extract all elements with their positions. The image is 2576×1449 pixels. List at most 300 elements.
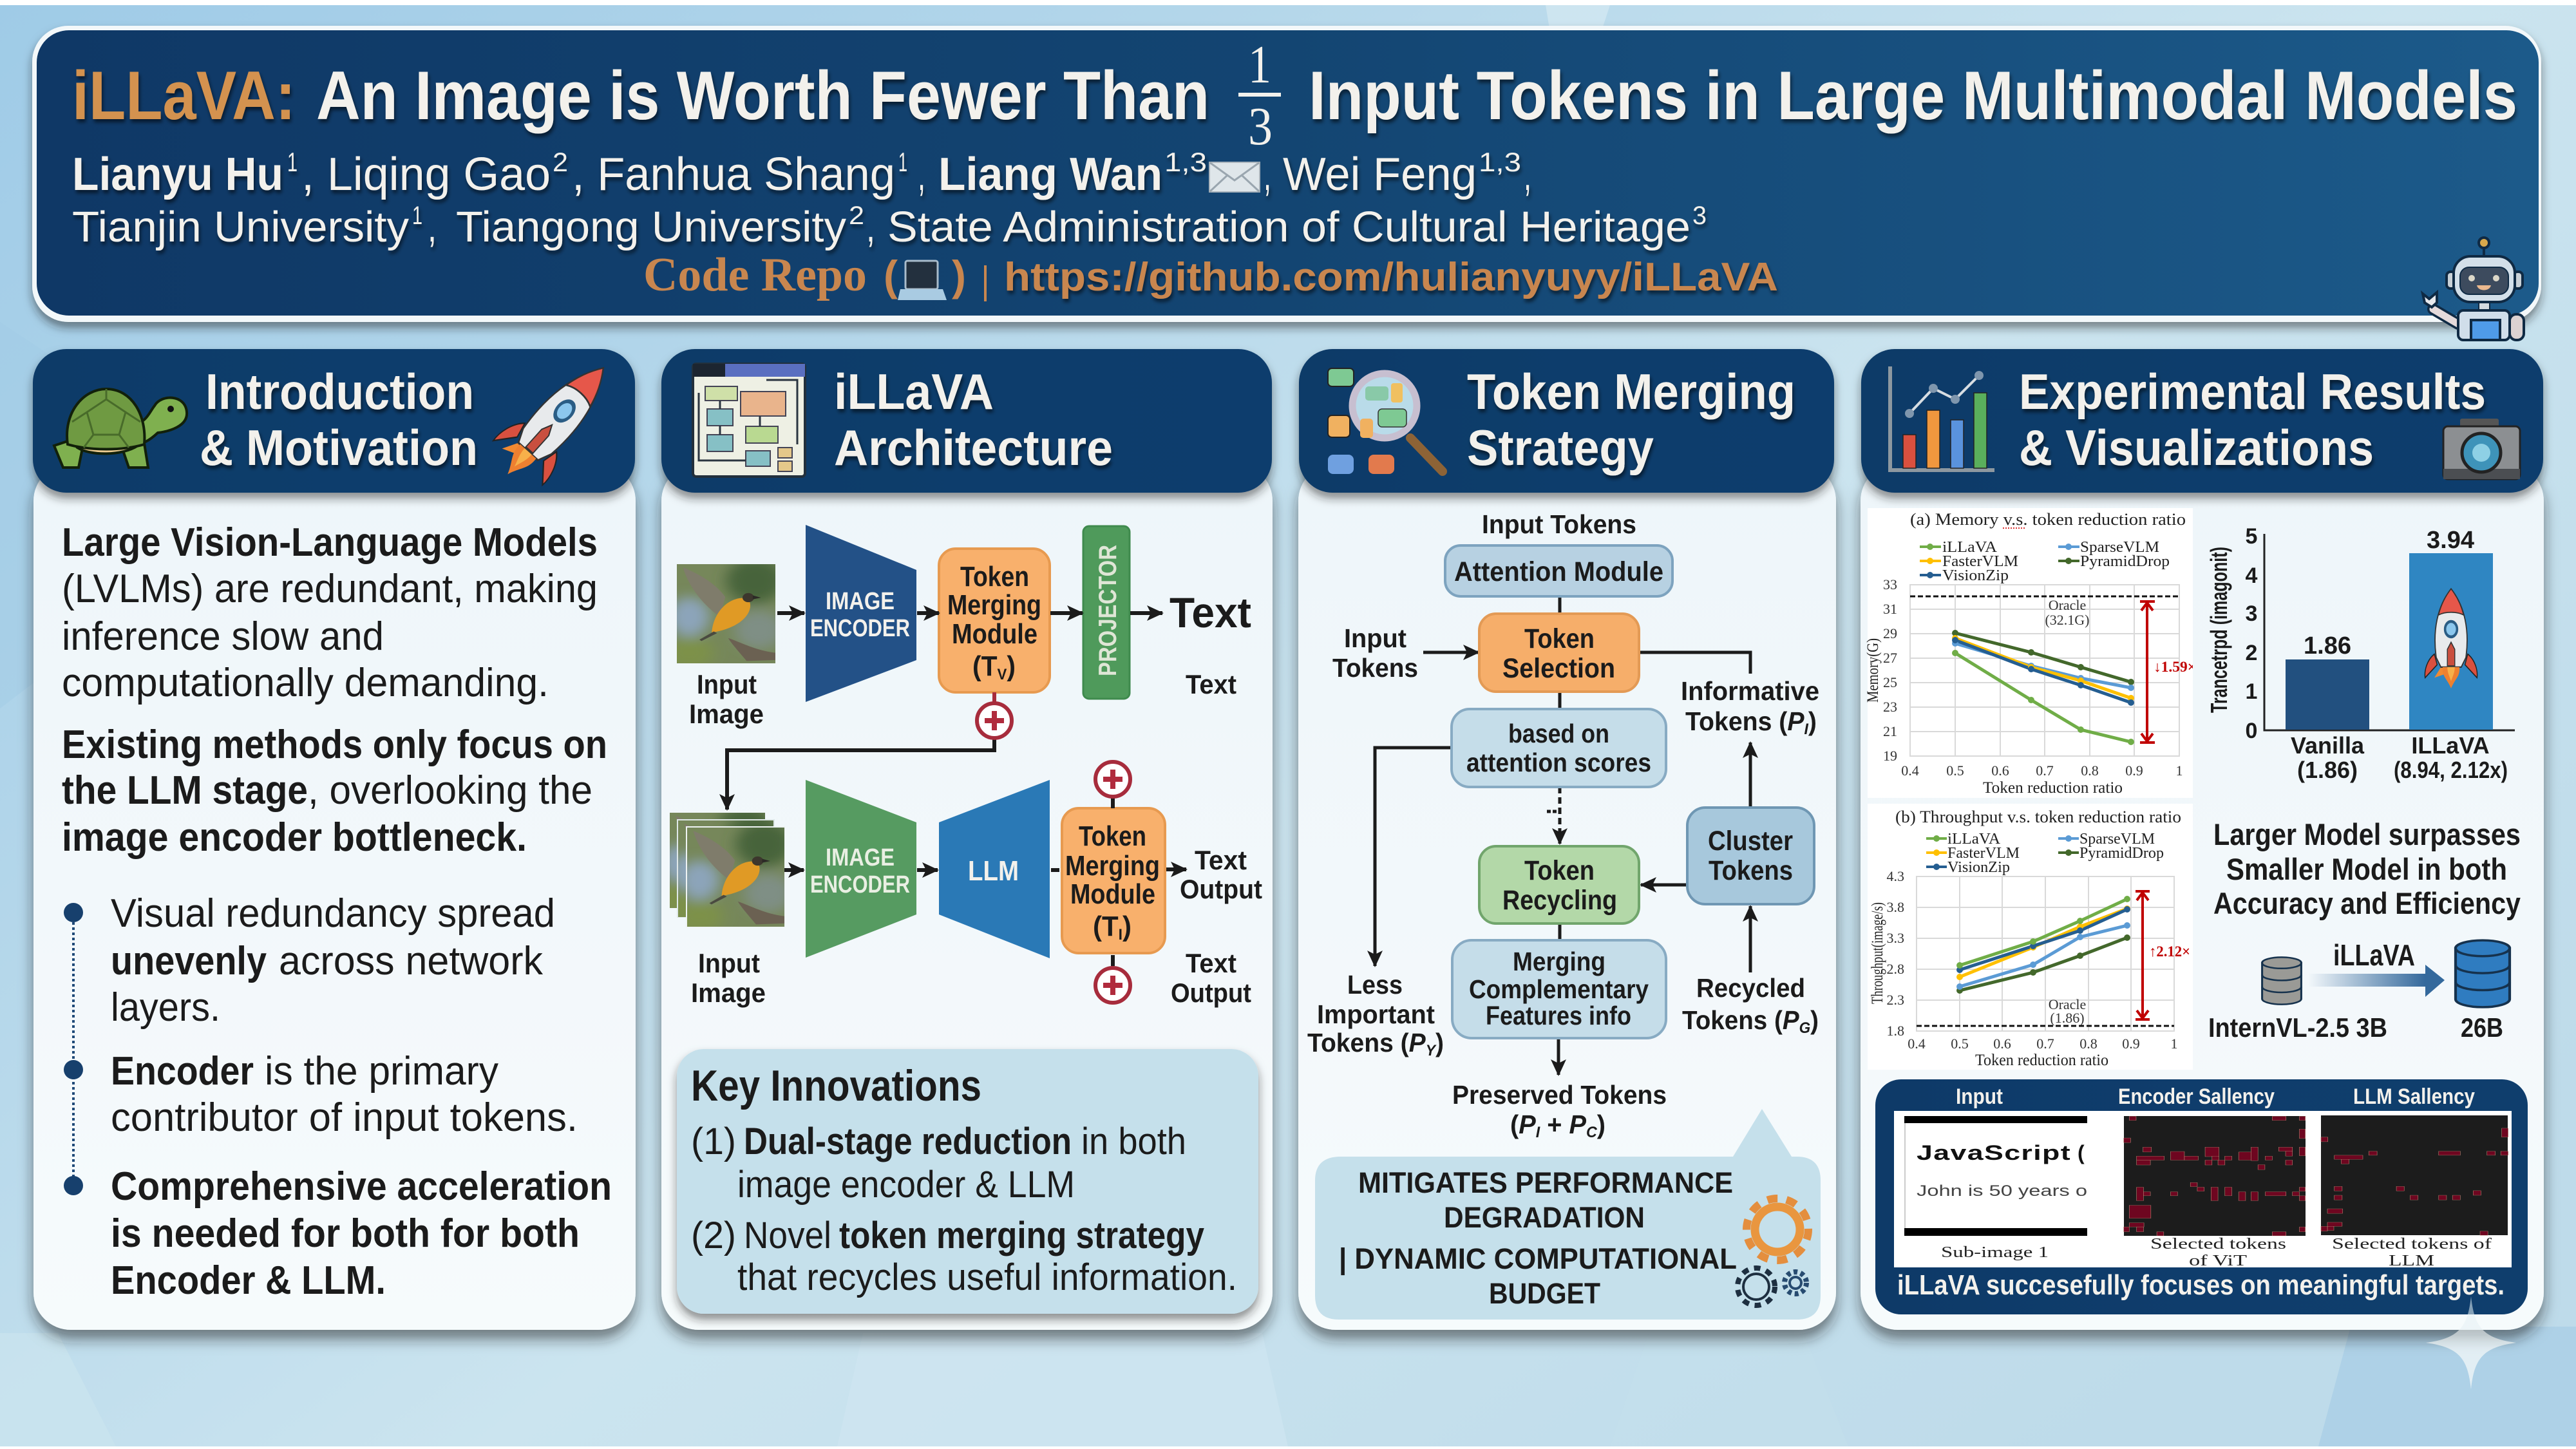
callout: performance: | DYNAMIC COMPUTATIONAL bbox=[1339, 1242, 1737, 1276]
labels: flow side text: Tokens (P bbox=[1682, 1005, 1800, 1035]
bar chart: vanilla vs illava: Trancetrpd (imagonit) bbox=[2206, 547, 2232, 713]
tick labels: 0.6 bbox=[1993, 1036, 2011, 1052]
labels: flow side text: ) bbox=[1808, 706, 1817, 736]
affiliations: 3 bbox=[1692, 202, 1707, 230]
column headings bbox=[1956, 1084, 2475, 1109]
image captions: of ViT bbox=[2189, 1253, 2247, 1269]
callout: key innovations: Dual-stage reduction bbox=[744, 1121, 1072, 1162]
model scaling graphic: iLLaVA bbox=[2333, 938, 2415, 972]
tick labels: 0.8 bbox=[2079, 1036, 2098, 1052]
arrow: scaling bbox=[2308, 965, 2445, 997]
image encoder blue: ENCODER bbox=[810, 615, 910, 642]
axis titles: Memory(G) bbox=[1864, 638, 1882, 703]
image captions: LLM bbox=[2389, 1253, 2434, 1269]
icon: gears bbox=[1738, 1198, 1808, 1305]
series markers bbox=[1956, 896, 2130, 994]
y ticks: 0 bbox=[2246, 719, 2257, 743]
node: attention scores: based on bbox=[1508, 719, 1609, 748]
affiliations: Tianjin University bbox=[72, 203, 410, 251]
token merging module TI: ) bbox=[1122, 911, 1132, 942]
bar: vanilla: Vanilla bbox=[2291, 732, 2365, 759]
bar chart: vanilla vs illava bbox=[2206, 524, 2515, 783]
axis titles: Token reduction ratio bbox=[1975, 1052, 2108, 1069]
node: cluster tokens: Tokens bbox=[1709, 855, 1793, 886]
legend: SparseVLM bbox=[2079, 831, 2155, 848]
labels: flow side text: Recycled bbox=[1696, 973, 1805, 1003]
tick labels: 0.4 bbox=[1901, 762, 1919, 779]
output text top: Text bbox=[1186, 669, 1236, 699]
image: input bird bbox=[665, 558, 784, 669]
tick labels: 0.8 bbox=[2081, 762, 2099, 779]
labels: flow side text: Tokens bbox=[1332, 653, 1418, 683]
tick labels bbox=[1883, 576, 2183, 779]
flowchart: token merging bbox=[1307, 509, 1819, 1141]
image encoder blue: IMAGE bbox=[826, 588, 895, 615]
node: attention module: Attention Module bbox=[1454, 556, 1663, 587]
icon: architecture diagram bbox=[693, 364, 805, 477]
labels: flow side text bbox=[1307, 623, 1819, 1141]
code repo link: ( bbox=[884, 252, 898, 299]
authors: 1,3 bbox=[1164, 147, 1207, 177]
panel: experimental results body bbox=[1861, 464, 2544, 1330]
image stack bbox=[658, 806, 793, 933]
labels: flow side text: (P bbox=[1510, 1110, 1537, 1139]
annotation: 1.59x reduction bbox=[2140, 601, 2196, 743]
heading bar: architecture bbox=[661, 349, 1272, 493]
text block: motivation paragraphs: Existing methods only focus on bbox=[62, 723, 607, 767]
callout: key innovations: that recycles useful information. bbox=[737, 1256, 1237, 1298]
authors: 1,3 bbox=[1479, 147, 1521, 177]
title: iLLaVA: bbox=[72, 57, 296, 134]
annotation: 1.59x reduction: ↓1.59× bbox=[2154, 659, 2196, 675]
affiliations: 1 bbox=[412, 202, 422, 230]
icon: envelope bbox=[1209, 162, 1260, 192]
image captions bbox=[1941, 1236, 2492, 1269]
output text top bbox=[1170, 589, 1251, 699]
image: encoder saliency bbox=[2124, 1116, 2306, 1236]
labels: flow side text: I bbox=[1536, 1124, 1540, 1141]
token merging module Tv: Token bbox=[960, 561, 1029, 592]
arrows: top row bbox=[777, 611, 1162, 615]
connectors bbox=[1375, 596, 1750, 1075]
label: text output bbox=[1171, 845, 1262, 1008]
heading text: Introduction bbox=[205, 363, 474, 420]
authors: , bbox=[1264, 149, 1271, 200]
affiliations: , bbox=[428, 203, 437, 251]
image captions: Selected tokens of bbox=[2332, 1236, 2492, 1253]
legend: iLLaVA bbox=[1947, 831, 2001, 848]
labels: flow side text: ) bbox=[1435, 1028, 1444, 1057]
tick labels: 0.5 bbox=[1946, 762, 1964, 779]
series lines bbox=[1955, 633, 2131, 742]
panel: token merging body bbox=[1298, 464, 1836, 1330]
title bbox=[72, 57, 2517, 134]
token merging module Tv: Module bbox=[952, 618, 1037, 650]
token merging module TI: I bbox=[1119, 926, 1122, 943]
image: input sub-image: JavaScript bbox=[1917, 1141, 2071, 1164]
label: input image top: Input bbox=[697, 669, 757, 699]
text block: larger model bbox=[2213, 817, 2521, 920]
callout: key innovations bbox=[677, 1049, 1258, 1314]
labels: flow side text: G bbox=[1799, 1019, 1810, 1037]
series lines bbox=[1960, 899, 2127, 990]
label: input image bottom: Input bbox=[698, 948, 760, 978]
callout: key innovations: in both bbox=[1081, 1121, 1186, 1162]
heading text: & Visualizations bbox=[2019, 419, 2374, 476]
chart: memory vs token reduction ratio bbox=[1864, 508, 2196, 798]
tick labels: 0.7 bbox=[2036, 1036, 2054, 1052]
heading text: iLLaVA bbox=[834, 363, 994, 420]
node: cluster tokens: Cluster bbox=[1708, 826, 1793, 857]
tick labels: 23 bbox=[1883, 699, 1897, 715]
authors: Liang Wan bbox=[938, 149, 1162, 200]
bar: vanilla: 1.86 bbox=[2304, 632, 2351, 659]
oracle line: Oracle bbox=[2049, 996, 2086, 1012]
text block: motivation paragraphs: computationally demanding. bbox=[62, 661, 549, 705]
image captions: Selected tokens bbox=[2150, 1236, 2286, 1253]
node: merging complementary features: Merging bbox=[1513, 947, 1605, 976]
connector with plus node bbox=[727, 692, 1012, 810]
image: input sub-image: John is 50 years o bbox=[1917, 1182, 2087, 1200]
chart: throughput vs token reduction ratio: (b) Throughput v.s. token reduction ratio bbox=[1895, 808, 2181, 826]
legend: VisionZip bbox=[1947, 859, 2010, 876]
node: token selection bbox=[1479, 614, 1639, 692]
code repo link: ) bbox=[952, 252, 966, 299]
label: input tokens top: Input Tokens bbox=[1482, 509, 1636, 539]
tick labels: 29 bbox=[1883, 625, 1897, 641]
legend: FasterVLM bbox=[1942, 553, 2018, 570]
label: input image bottom bbox=[691, 948, 766, 1008]
heading text: Token Merging bbox=[1467, 363, 1795, 420]
heading bar: experimental results bbox=[1861, 349, 2543, 493]
callout: key innovations: (1) bbox=[691, 1121, 736, 1162]
output text top: Text bbox=[1170, 589, 1251, 636]
tick labels: 27 bbox=[1883, 650, 1897, 666]
image: input sub-image: ( bbox=[2078, 1141, 2085, 1164]
node: attention scores: attention scores bbox=[1466, 748, 1651, 777]
arrows: bottom row bbox=[784, 797, 1186, 966]
bar: vanilla bbox=[2286, 632, 2369, 783]
heading text bbox=[1467, 363, 1795, 476]
token merging module TI bbox=[1062, 808, 1165, 953]
node: token recycling: Recycling bbox=[1502, 885, 1617, 916]
image encoder green: ENCODER bbox=[810, 871, 910, 898]
labels: flow side text: + bbox=[1540, 1110, 1569, 1139]
chart: throughput vs token reduction ratio bbox=[1868, 804, 2193, 1070]
plus nodes bbox=[1095, 762, 1130, 1003]
token merging module TI: Module bbox=[1070, 878, 1155, 910]
label: text output: Text bbox=[1195, 845, 1247, 875]
labels: flow side text: Y bbox=[1426, 1042, 1437, 1059]
node: cluster tokens bbox=[1687, 808, 1814, 904]
bar: vanilla: (1.86) bbox=[2297, 757, 2358, 783]
panel: architecture body bbox=[661, 464, 1273, 1330]
tick labels: 19 bbox=[1883, 748, 1897, 764]
caption: meaningful targets: iLLaVA succesefully focuses on meaningful targets. bbox=[1897, 1269, 2505, 1301]
labels: flow side text: Important bbox=[1317, 999, 1435, 1029]
affiliations: 2 bbox=[849, 202, 864, 230]
label: input image top: Image bbox=[689, 699, 764, 729]
authors: , Fanhua Shang bbox=[572, 149, 895, 200]
list: motivation bullets: Encoder bbox=[111, 1049, 254, 1094]
image encoder green: IMAGE bbox=[826, 844, 895, 871]
heading bar: token merging strategy bbox=[1299, 349, 1834, 493]
affiliations: State Administration of Cultural Heritage bbox=[887, 203, 1690, 251]
text block: motivation paragraphs: (LVLMs) are redundant, making bbox=[62, 567, 598, 611]
list: motivation bullets: is needed for both for both bbox=[111, 1211, 580, 1256]
fraction one third: 1 bbox=[1248, 35, 1271, 95]
heading text bbox=[200, 363, 478, 476]
legend: PyramidDrop bbox=[2080, 553, 2170, 570]
labels: flow side text: Informative bbox=[1681, 676, 1819, 706]
node: merging complementary features bbox=[1452, 940, 1666, 1038]
node: token recycling bbox=[1479, 846, 1639, 923]
labels: flow side text: Input bbox=[1344, 623, 1406, 653]
title: An Image is Worth Fewer Than bbox=[316, 57, 1209, 134]
heading text: Experimental Results bbox=[2019, 363, 2486, 420]
text block: motivation paragraphs: inference slow and bbox=[62, 614, 384, 659]
axis titles: Throughput(image/s) bbox=[1869, 902, 1886, 1004]
legend: SparseVLM bbox=[2080, 539, 2159, 556]
tick labels: 2.3 bbox=[1887, 992, 1904, 1008]
tick labels: 33 bbox=[1883, 576, 1897, 592]
tick labels: 21 bbox=[1883, 723, 1897, 739]
token merging module Tv: V bbox=[998, 666, 1007, 683]
affiliations: , bbox=[866, 203, 875, 251]
list: motivation bullets: Visual redundancy spread bbox=[111, 891, 555, 936]
label: text output: Output bbox=[1171, 978, 1251, 1008]
labels: flow side text: Less bbox=[1347, 970, 1403, 999]
authors: Wei Feng bbox=[1283, 149, 1477, 200]
labels: flow side text: C bbox=[1586, 1124, 1597, 1141]
tick labels: 3.8 bbox=[1887, 899, 1904, 915]
oracle line bbox=[1910, 596, 2179, 628]
icon: laptop bbox=[898, 261, 947, 300]
icon: sparkle star bbox=[2426, 1296, 2516, 1389]
tick labels: 25 bbox=[1883, 674, 1897, 690]
y ticks: 5 bbox=[2246, 524, 2257, 549]
label: input image top bbox=[689, 669, 764, 729]
list: motivation bullets: Encoder & LLM. bbox=[111, 1258, 386, 1303]
image captions: Sub-image 1 bbox=[1941, 1244, 2049, 1261]
callout: key innovations: token merging strategy bbox=[839, 1215, 1204, 1256]
callout: performance: DEGRADATION bbox=[1444, 1201, 1645, 1234]
token merging module TI: Token bbox=[1079, 820, 1146, 852]
y ticks: 4 bbox=[2246, 564, 2258, 588]
callout: key innovations: (2) bbox=[691, 1215, 736, 1256]
node: merging complementary features: Complementary bbox=[1469, 974, 1649, 1004]
grid and axes bbox=[1917, 876, 2174, 1031]
image encoder green bbox=[806, 780, 916, 958]
tick labels: 1 bbox=[2175, 762, 2183, 779]
icon: robot mascot bbox=[2423, 238, 2524, 340]
icon: turtle bbox=[54, 389, 187, 468]
token merging module TI: (T bbox=[1093, 911, 1120, 942]
authors: Lianyu Hu bbox=[72, 149, 283, 200]
image encoder blue bbox=[806, 525, 916, 702]
panel: saliency visualization bbox=[1875, 1079, 2528, 1314]
node: token selection: Selection bbox=[1502, 653, 1615, 684]
text block: motivation paragraphs: the LLM stage bbox=[62, 768, 308, 813]
text block: motivation paragraphs: , overlooking the bbox=[308, 768, 592, 813]
text block: larger model: Smaller Model in both bbox=[2226, 852, 2507, 886]
node: merging complementary features: Features info bbox=[1486, 1001, 1631, 1030]
column headings: Encoder Sallency bbox=[2118, 1084, 2275, 1109]
callout: performance bbox=[1315, 1109, 1821, 1320]
tick labels bbox=[1887, 868, 2178, 1052]
callout: performance: MITIGATES PERFORMANCE bbox=[1358, 1166, 1733, 1199]
oracle line: (32.1G) bbox=[2045, 612, 2090, 628]
authors: 2 bbox=[553, 147, 568, 177]
authors: , bbox=[1524, 149, 1531, 200]
list: motivation bullets: layers. bbox=[111, 985, 220, 1030]
icon: camera bbox=[2443, 419, 2520, 479]
image: input sub-image bbox=[1904, 1116, 2087, 1236]
projector bbox=[1083, 526, 1130, 699]
y ticks: 1 bbox=[2246, 679, 2257, 704]
column headings: Input bbox=[1956, 1084, 2003, 1109]
list: motivation bullets: unevenly bbox=[111, 939, 267, 983]
token merging module TI: Merging bbox=[1065, 850, 1160, 882]
text block: larger model: Larger Model surpasses bbox=[2213, 817, 2521, 851]
bar: illava: (8.94, 2.12x) bbox=[2394, 757, 2508, 783]
axis titles: Token reduction ratio bbox=[1983, 779, 2123, 797]
authors: , bbox=[918, 149, 925, 200]
heading text: Strategy bbox=[1467, 419, 1654, 476]
axis titles bbox=[1869, 902, 2108, 1069]
tick labels: 0.9 bbox=[2125, 762, 2143, 779]
token merging module Tv: Merging bbox=[947, 589, 1041, 621]
icon: bar chart bbox=[1890, 366, 1994, 470]
heading bar: introduction and motivation bbox=[33, 346, 635, 497]
tick labels: 2.8 bbox=[1887, 961, 1904, 977]
sparkle overlay bbox=[2426, 1296, 2516, 1389]
code repo link bbox=[643, 249, 1778, 301]
token merging module Tv: ) bbox=[1007, 650, 1016, 682]
list: motivation bullets bbox=[64, 891, 612, 1303]
label: text output: Text bbox=[1186, 948, 1236, 978]
LLM: LLM bbox=[968, 855, 1019, 887]
list: motivation bullets: Comprehensive acceleration bbox=[111, 1164, 612, 1209]
model scaling graphic: InternVL-2.5 3B bbox=[2208, 1012, 2387, 1043]
model scaling graphic bbox=[2208, 938, 2510, 1043]
oracle line: Oracle bbox=[2049, 597, 2086, 613]
authors bbox=[72, 147, 1531, 200]
code repo link: https://github.com/hulianyuyy/iLLaVA bbox=[1004, 255, 1778, 299]
labels: flow side text: ) bbox=[1810, 1005, 1819, 1035]
legend bbox=[1926, 831, 2164, 876]
list: motivation bullets: is the primary bbox=[265, 1049, 498, 1094]
tick labels: 0.9 bbox=[2122, 1036, 2140, 1052]
callout: key innovations: Novel bbox=[744, 1215, 831, 1256]
labels: flow side text: ) bbox=[1597, 1110, 1605, 1139]
y ticks bbox=[2246, 524, 2258, 743]
heading text bbox=[2019, 363, 2486, 476]
icon: rocket bbox=[483, 346, 628, 497]
list: motivation bullets: contributor of input tokens. bbox=[111, 1095, 578, 1140]
labels: flow side text: Tokens (P bbox=[1685, 706, 1805, 736]
text block: motivation paragraphs: image encoder bottleneck. bbox=[62, 815, 527, 860]
architecture diagram bbox=[658, 525, 1262, 1008]
labels: flow side text: Tokens (P bbox=[1307, 1028, 1426, 1057]
legend bbox=[1920, 539, 2170, 584]
tick labels: 3.3 bbox=[1887, 930, 1904, 946]
legend: FasterVLM bbox=[1947, 845, 2020, 862]
bar: illava: 3.94 bbox=[2427, 527, 2474, 554]
icon: small database bbox=[2262, 957, 2301, 1005]
list: motivation bullets: across network bbox=[279, 939, 544, 983]
bar: illava bbox=[2394, 527, 2508, 783]
oracle line: (1.86) bbox=[2050, 1010, 2085, 1026]
tick labels: 31 bbox=[1883, 601, 1897, 617]
grid and axes bbox=[1910, 585, 2179, 756]
icon: rocket in bar bbox=[2425, 589, 2477, 688]
icon: large database bbox=[2456, 940, 2510, 1007]
label: input image bottom: Image bbox=[691, 978, 766, 1008]
annotation: 2.12x increase: ↑2.12× bbox=[2149, 943, 2190, 960]
tick labels: 1.8 bbox=[1887, 1023, 1904, 1039]
legend: iLLaVA bbox=[1942, 539, 1998, 556]
annotation: 2.12x increase bbox=[2136, 891, 2190, 1019]
node: attention scores bbox=[1452, 709, 1666, 787]
callout: key innovations: image encoder & LLM bbox=[737, 1164, 1075, 1206]
tick labels: 0.6 bbox=[1991, 762, 2009, 779]
fraction one third bbox=[1238, 35, 1281, 156]
y ticks: 3 bbox=[2246, 601, 2257, 626]
authors: , Liqing Gao bbox=[301, 149, 551, 200]
authors: 1 bbox=[898, 147, 907, 177]
text block: larger model: Accuracy and Efficiency bbox=[2213, 886, 2521, 920]
affiliations: Tiangong University bbox=[456, 203, 847, 251]
heading text: & Motivation bbox=[200, 419, 478, 476]
code repo link: Code Repo bbox=[643, 249, 867, 301]
text block: motivation paragraphs: Large Vision-Language Models bbox=[62, 520, 598, 565]
tick labels: 4.3 bbox=[1887, 868, 1904, 884]
node: token recycling: Token bbox=[1524, 855, 1595, 886]
labels: flow side text: Preserved Tokens bbox=[1452, 1080, 1667, 1110]
series markers bbox=[1952, 630, 2134, 745]
heading text: Architecture bbox=[834, 419, 1113, 476]
label: text output: Output bbox=[1180, 874, 1262, 904]
node: attention module bbox=[1445, 545, 1672, 596]
heading text bbox=[834, 363, 1113, 476]
fraction one third: 3 bbox=[1248, 97, 1273, 156]
y ticks: 2 bbox=[2246, 641, 2257, 665]
token merging module Tv: (T bbox=[972, 650, 999, 682]
node: token selection: Token bbox=[1524, 623, 1595, 654]
bar: illava: ILLaVA bbox=[2411, 732, 2490, 759]
text block: motivation paragraphs bbox=[62, 520, 607, 860]
model scaling graphic: 26B bbox=[2461, 1012, 2503, 1043]
header banner bbox=[32, 26, 2541, 322]
image: llm saliency bbox=[2321, 1115, 2508, 1235]
chart: memory vs token reduction ratio: (a) Memory v.s. token reduction ratio bbox=[1910, 510, 2186, 529]
affiliations bbox=[72, 202, 1707, 251]
oracle line bbox=[1917, 996, 2174, 1026]
token merging module Tv bbox=[939, 549, 1050, 692]
axis titles bbox=[1864, 638, 2123, 797]
labels: flow side text: I bbox=[1804, 721, 1809, 738]
column headings: LLM Sallency bbox=[2353, 1084, 2475, 1109]
legend: VisionZip bbox=[1942, 567, 2009, 584]
tick labels: 1 bbox=[2170, 1036, 2178, 1052]
tick labels: 0.5 bbox=[1951, 1036, 1969, 1052]
callout: key innovations: Key Innovations bbox=[691, 1061, 981, 1110]
LLM bbox=[939, 780, 1050, 958]
projector: PROJECTOR bbox=[1094, 545, 1122, 676]
authors: 1 bbox=[287, 147, 298, 177]
tick labels: 0.7 bbox=[2036, 762, 2054, 779]
